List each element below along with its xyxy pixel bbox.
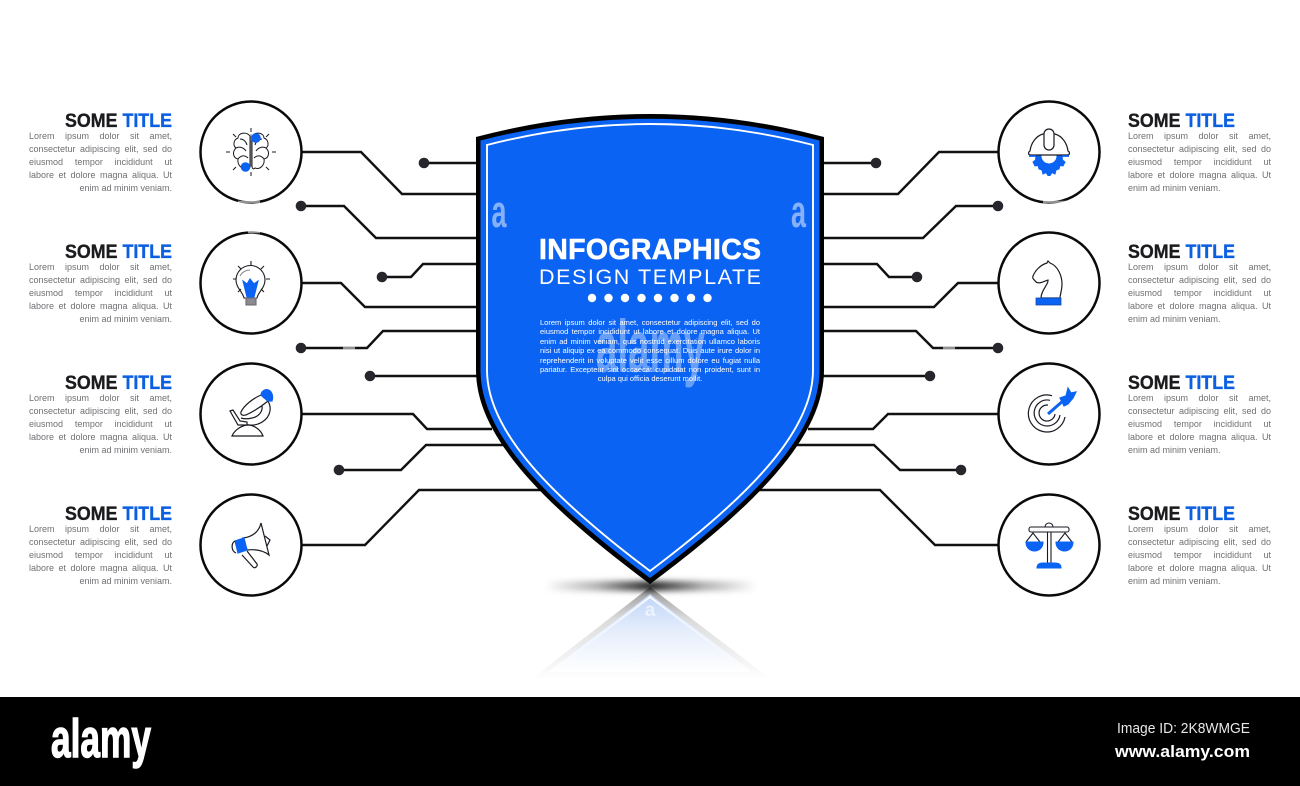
footer website: www.alamy.com [1114,742,1250,761]
text block left 3: Lorem ipsum dolor sit amet, [29,392,172,402]
text block right 4: consectetur adipiscing elit, sed do [1128,536,1271,546]
shield body text: reprehenderit in voluptate velit esse cillum dolore eu fugiat nulla [540,356,760,364]
heading right 2: SOME TITLE [1128,241,1235,263]
text block left 1 [29,130,172,192]
text block left 2: eiusmod tempor incididunt ut [29,288,172,298]
footer bar [0,697,1300,786]
text block right 1: consectetur adipiscing elit, sed do [1128,144,1271,154]
text block left 3: labore et dolore magna aliqua. Ut [29,432,172,442]
shield title: INFOGRAPHICS [539,234,761,266]
shield body text: culpa qui officia deserunt mollit. [598,374,702,383]
heading left 2: SOME TITLE [65,241,172,263]
heading right 4: SOME TITLE [1128,503,1235,525]
heading left 3: SOME TITLE [65,372,172,394]
text block left 4 [29,524,172,586]
text block left 2: enim ad minim veniam. [79,314,172,324]
text block right 4 [1128,524,1271,586]
shield [476,114,824,584]
text block left 4: labore et dolore magna aliqua. Ut [29,562,172,572]
text block right 1: enim ad minim veniam. [1128,182,1221,192]
shield subtitle: DESIGN TEMPLATE [539,265,761,289]
text block right 2: eiusmod tempor incididunt ut [1128,288,1271,298]
text block right 3: consectetur adipiscing elit, sed do [1128,406,1271,416]
text block right 4: labore et dolore magna aliqua. Ut [1128,562,1271,572]
text block left 3: enim ad minim veniam. [79,444,172,454]
footer logo: alamy: alamy [51,709,151,769]
icon: brain [226,128,276,176]
item circle 7 [998,364,1100,464]
item circle 6 [998,232,1100,334]
shield body text: eiusmod tempor incididunt ut labore et dolore magna aliqua. Ut [540,327,760,336]
text block right 3: enim ad minim veniam. [1128,444,1221,454]
shield body text: Lorem ipsum dolor sit amet, consectetur adipiscing elit, sed do [540,318,760,327]
text block right 3: labore et dolore magna aliqua. Ut [1128,432,1271,442]
shield body text: enim ad minim veniam, quis nostrud exercitation ullamco laboris [540,337,760,346]
text block left 1: Lorem ipsum dolor sit amet, [29,130,172,140]
heading left 4: SOME TITLE [65,503,172,525]
footer image id: Image ID: 2K8WMGE [1117,720,1250,737]
icon: chess knight [1033,261,1062,305]
text block right 1: Lorem ipsum dolor sit amet, [1128,130,1271,140]
text block left 2 [29,262,172,324]
item circle 4 [200,494,302,596]
item circle 3 [200,364,302,464]
text block right 4: Lorem ipsum dolor sit amet, [1128,524,1271,534]
dotted separator [588,294,712,302]
text block left 2: labore et dolore magna aliqua. Ut [29,300,172,310]
text block left 2: consectetur adipiscing elit, sed do [29,274,172,284]
text block left 4: consectetur adipiscing elit, sed do [29,536,172,546]
shield body text [540,318,760,383]
text block right 2 [1128,262,1271,324]
text block right 2: enim ad minim veniam. [1128,314,1221,324]
watermark overlay: a [492,186,507,237]
shield reflection: a [645,600,656,621]
heading right 3: SOME TITLE [1128,372,1235,394]
text block left 1: labore et dolore magna aliqua. Ut [29,170,172,180]
ground shadow [545,581,757,591]
icon: light bulb [233,261,270,305]
icon: megaphone [232,523,270,568]
text block right 2: labore et dolore magna aliqua. Ut [1128,300,1271,310]
circuit lines: left [301,152,545,545]
text block right 2: consectetur adipiscing elit, sed do [1128,274,1271,284]
icon: target and arrow [1028,388,1076,432]
circuit end dots [296,158,1003,475]
text block right 1: labore et dolore magna aliqua. Ut [1128,170,1271,180]
text block right 4: enim ad minim veniam. [1128,576,1221,586]
heading left 1: SOME TITLE [65,110,172,132]
text block left 3: eiusmod tempor incididunt ut [29,418,172,428]
text block left 4: eiusmod tempor incididunt ut [29,550,172,560]
text block left 2: Lorem ipsum dolor sit amet, [29,262,172,272]
icon: helmet and gear [1029,129,1069,176]
text block right 3 [1128,392,1271,454]
item circle 5 [998,102,1100,202]
item circle 2 [200,232,302,334]
text block right 2: Lorem ipsum dolor sit amet, [1128,262,1271,272]
text block right 4: eiusmod tempor incididunt ut [1128,550,1271,560]
text block left 1: eiusmod tempor incididunt ut [29,156,172,166]
circuit lines: right [755,152,998,545]
item circle 1 [200,102,302,202]
heading right 1: SOME TITLE [1128,110,1235,132]
text block left 3 [29,392,172,454]
shield body text: nisi ut aliquip ex ea commodo consequat. Duis aute irure dolor in [540,346,760,355]
text block left 4: enim ad minim veniam. [79,576,172,586]
text block left 1: consectetur adipiscing elit, sed do [29,144,172,154]
watermark overlay: a [791,186,807,237]
icon: balance scales [1026,523,1073,568]
text block right 3: Lorem ipsum dolor sit amet, [1128,392,1271,402]
text block right 3: eiusmod tempor incididunt ut [1128,418,1271,428]
text block right 1: eiusmod tempor incididunt ut [1128,156,1271,166]
text block left 4: Lorem ipsum dolor sit amet, [29,524,172,534]
text block left 1: enim ad minim veniam. [79,182,172,192]
text block left 3: consectetur adipiscing elit, sed do [29,406,172,416]
shield body text: pariatur. Excepteur sint occaecat cupidatat non proident, sunt in [540,365,760,374]
shield reflection [530,587,772,680]
item circle 8 [998,494,1100,596]
icon: microscope [230,390,273,436]
watermark overlay: alamy [596,305,705,388]
text block right 1 [1128,130,1271,192]
